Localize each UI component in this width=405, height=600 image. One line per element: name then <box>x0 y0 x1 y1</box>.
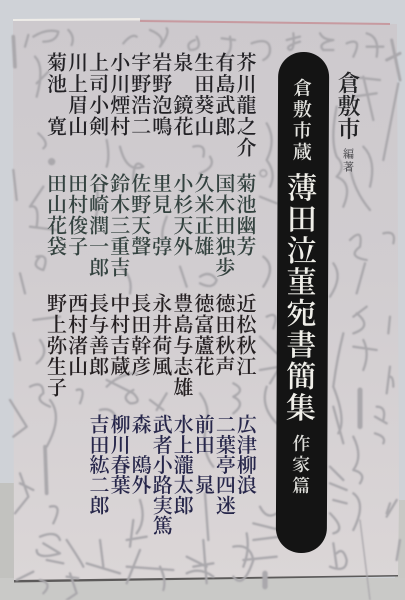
main title: 薄田泣菫宛書簡集 <box>279 172 324 423</box>
authors group 2: 菊池幽芳 国木田独歩 久米正雄 小杉天外 里見 弴 佐野天聲 鈴木三重吉 谷崎潤一郎 田村俊子 田山花袋 <box>43 172 261 278</box>
editor name: 倉敷市 <box>332 71 366 140</box>
authors group 4: 広津柳浪 二葉亭四迷 前田 晁 水上瀧太郎 武者小路実篤 森 鴎外 柳川春葉 吉田紘二郎 <box>85 414 261 535</box>
authors group 1: 芥川龍之介 有島武郎 生田葵山 泉 鏡花 岩野泡鳴 宇野浩二 小川煙村 上司小剣 川上眉山 菊池 寛 <box>43 52 261 158</box>
authors group 3: 近松秋江 徳田秋声 徳富蘆花 豊島与志雄 永井荷風 長田幹彦 中村吉蔵 長与善郎 西村渚山 野上弥生子 <box>43 292 261 398</box>
editor suffix: 編著 <box>340 148 356 174</box>
volume label: 作家篇 <box>288 434 314 497</box>
collection label: 倉敷市蔵 <box>289 78 316 163</box>
black title band <box>276 52 329 553</box>
